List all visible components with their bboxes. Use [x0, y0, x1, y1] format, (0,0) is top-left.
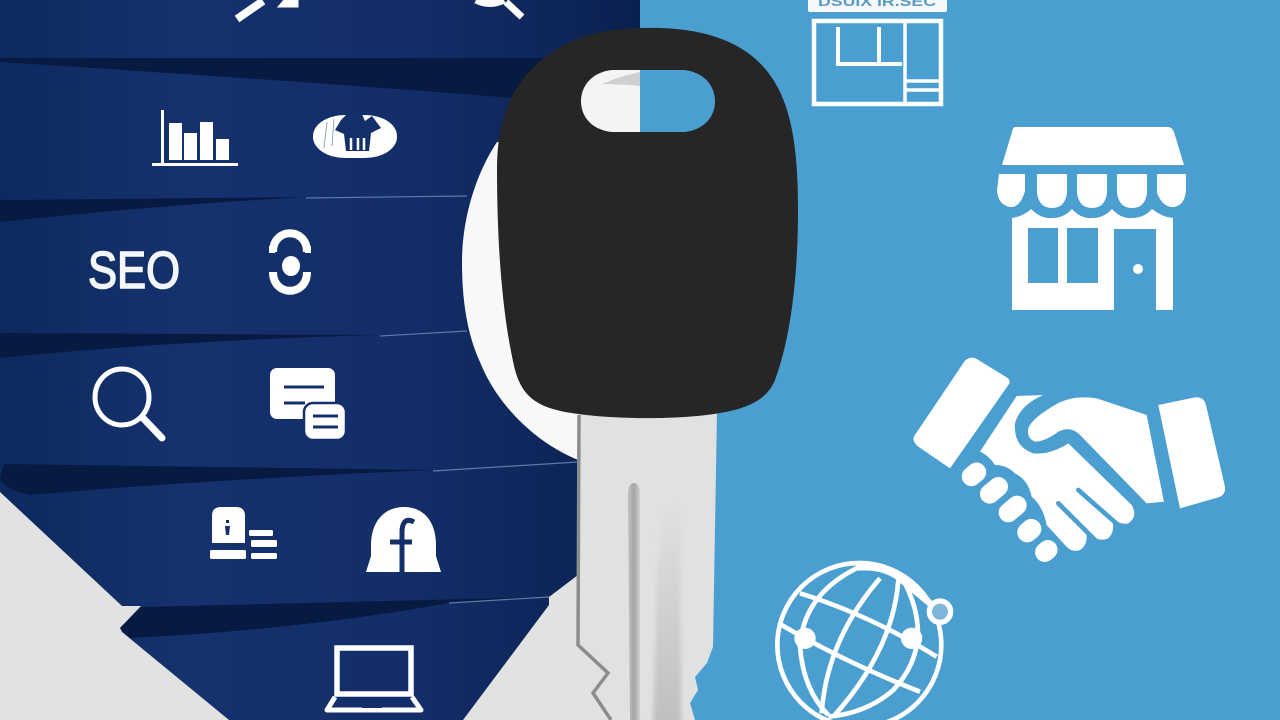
panel: navy folded ribbon	[0, 0, 640, 720]
left hand palm	[980, 395, 1134, 551]
icon: facebook bell	[366, 507, 441, 572]
fold shadow 5	[120, 597, 549, 638]
awning roof	[1002, 127, 1184, 165]
awning scallops	[997, 174, 1025, 207]
icon: shop storefront	[997, 127, 1186, 310]
right hand	[1028, 397, 1164, 503]
ribbon body	[0, 0, 640, 720]
heading: SEO: SEO	[88, 242, 180, 300]
globe outline	[777, 563, 941, 720]
label: top-right sign	[808, 0, 947, 12]
key hole	[580, 68, 718, 134]
blade edge	[578, 415, 611, 720]
shop body	[1012, 209, 1173, 310]
icon: bar chart	[152, 110, 238, 166]
panel: blue right half	[640, 0, 1280, 720]
meridians	[800, 567, 860, 715]
icon: search magnifier	[95, 369, 162, 438]
icon: person list	[210, 507, 277, 559]
icon: globe network	[777, 563, 951, 720]
icon: magnifier partial at top	[476, 0, 522, 17]
icon: laptop	[327, 648, 421, 710]
icon: brain blob	[313, 114, 397, 158]
blade second groove	[653, 508, 681, 720]
fold shadow 4	[0, 464, 433, 495]
parallels	[800, 593, 937, 657]
panel: light grey background	[0, 0, 640, 720]
shop windows	[1028, 228, 1058, 283]
icon: arrow partial at top	[237, 0, 298, 19]
icon: handshake	[913, 358, 1225, 566]
fold highlights	[306, 196, 578, 603]
knuckle blobs	[958, 459, 990, 490]
door knob	[1133, 264, 1143, 274]
white circle behind key	[462, 142, 640, 460]
nodes	[794, 628, 816, 649]
finger gaps	[1058, 490, 1120, 542]
key head	[497, 28, 798, 418]
right cuff	[1158, 397, 1225, 508]
icon: chat cards	[270, 368, 346, 440]
fold shadow 1	[0, 58, 560, 100]
key blade	[578, 410, 717, 720]
top highlight	[857, 567, 930, 603]
icon: website layout	[814, 21, 941, 104]
icon: ring link	[269, 233, 311, 291]
fold shadow 2	[0, 197, 306, 222]
left cuff	[913, 358, 1010, 468]
fold shadow 3	[0, 333, 380, 358]
blade groove	[628, 483, 640, 720]
